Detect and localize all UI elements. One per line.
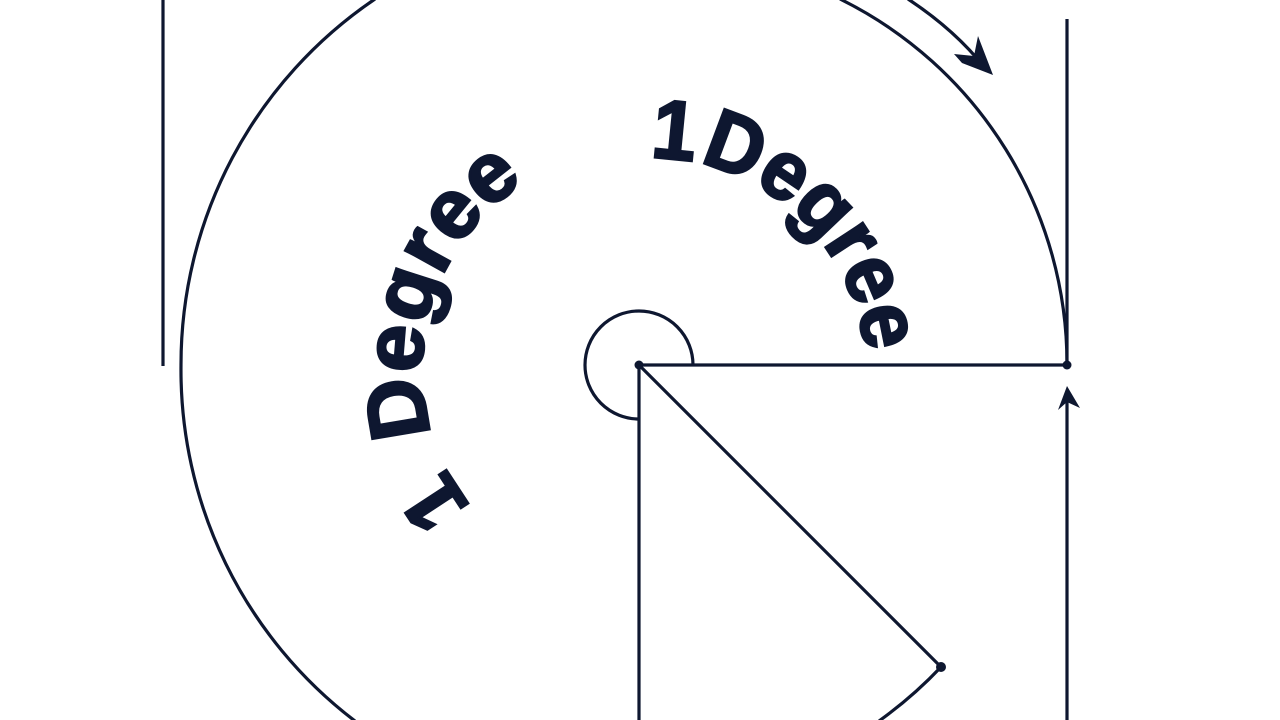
centre point [634, 360, 644, 370]
triangle lines from the centre [639, 365, 1067, 720]
arrow: upward vertical [1058, 386, 1080, 720]
right vertical line [1065, 19, 1069, 365]
large rotation arc [181, 0, 1067, 720]
label: right 1 Degree: 1 Degree [654, 100, 908, 348]
arrow: clockwise direction [908, 0, 993, 75]
angle marker arc [585, 311, 693, 419]
left vertical line [161, 0, 165, 366]
label: left 1 Degree: 1 Degree [366, 154, 517, 531]
diagonal end point [936, 662, 946, 672]
right end point [1062, 360, 1072, 370]
